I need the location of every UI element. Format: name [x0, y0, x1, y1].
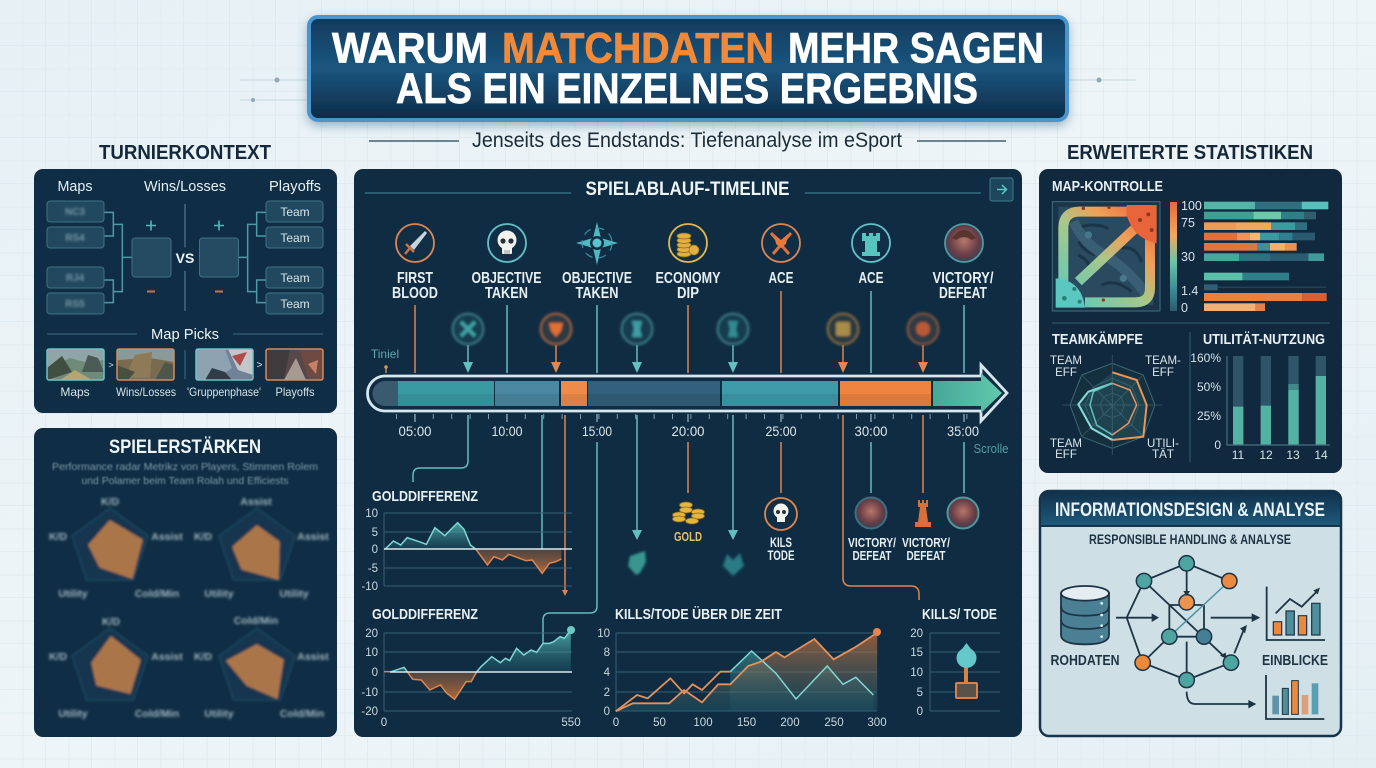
timeline arrow bar	[368, 365, 1007, 421]
radar charts: K/D	[101, 496, 119, 508]
icon: insights chart lower	[1266, 675, 1324, 719]
chart: Kills/Tode trophy: 15	[910, 647, 923, 659]
blurred description: und Polamer beim Team Rolah und Efficiests	[82, 475, 288, 487]
chart: Golddifferenz upper: -10	[361, 581, 378, 593]
blurred description: Performance radar Metrikz von Players, Stimmen Rolem	[52, 461, 318, 473]
icon: gold coins	[672, 502, 704, 524]
chart: Kills/Tode trophy: 0	[917, 706, 923, 718]
chart: Kills/Tode über die Zeit: 250	[824, 717, 844, 729]
event labels: VICTORY/	[932, 270, 994, 287]
map thumbnail labels: Playoffs	[276, 385, 314, 399]
map control heading: MAP-KONTROLLE	[1052, 178, 1163, 195]
event labels: DEFEAT	[939, 285, 987, 302]
bracket connector lines	[104, 204, 266, 311]
gold label: GOLD	[674, 530, 702, 544]
chart: Kills/Tode trophy: 5	[917, 687, 923, 699]
chart: Golddifferenz upper: 10	[365, 508, 378, 520]
panel: Spielerstärken	[34, 428, 337, 737]
chart: Golddifferenz lower: GOLDDIFFERENZ	[372, 606, 478, 623]
chart: Kills/Tode trophy: KILLS/ TODE	[922, 606, 997, 623]
bracket right team boxes	[266, 201, 323, 314]
timeline start marker: Tiniel	[371, 347, 399, 361]
panel header	[1040, 491, 1341, 526]
utility heading: UTILITÄT-NUTZUNG	[1203, 331, 1325, 348]
radar labels	[1050, 355, 1181, 461]
chart: Kills/Tode über die Zeit: 4	[604, 667, 611, 679]
bracket right team boxes: Team	[280, 231, 310, 245]
bracket column headings	[58, 178, 321, 195]
chart: Golddifferenz upper: 0	[372, 544, 378, 556]
chart: Golddifferenz lower: 0	[381, 717, 387, 729]
radar charts: Assist	[240, 496, 272, 508]
chart: Golddifferenz upper: 5	[372, 527, 378, 539]
chart: Kills/Tode über die Zeit: 150	[737, 717, 756, 729]
blurred seed labels: RS4	[65, 233, 85, 244]
event labels: OBJECTIVE	[472, 270, 542, 287]
bracket column headings: Maps	[58, 178, 92, 195]
victory/defeat labels	[848, 535, 950, 563]
icon: player portrait	[945, 224, 983, 262]
chart: Golddifferenz lower: 0	[372, 667, 378, 679]
map thumbnail labels: Wins/Losses	[116, 385, 176, 399]
event labels: DIP	[677, 285, 699, 302]
bar chart: utility usage: 13	[1286, 448, 1300, 462]
radar labels: TEAM	[1050, 355, 1082, 367]
title banner: MEHR SAGEN	[788, 24, 1044, 72]
map thumbnails: >	[257, 360, 263, 371]
event labels: FIRST	[397, 270, 433, 287]
radar charts: K/D	[102, 616, 120, 628]
title banner: WARUM	[332, 24, 488, 72]
blurred seed labels	[65, 207, 85, 310]
map thumbnails: >	[108, 360, 114, 370]
event labels	[392, 270, 994, 302]
radar charts: Utility	[204, 588, 234, 600]
bar chart: utility usage	[1190, 351, 1330, 462]
time labels: 20:00	[672, 423, 705, 439]
chart: Kills/Tode trophy: 10	[910, 667, 923, 679]
bracket left boxes	[47, 201, 104, 314]
chart: Kills/Tode über die Zeit: 100	[693, 717, 713, 729]
time labels: 30:00	[854, 423, 888, 439]
time labels	[398, 423, 979, 439]
event labels: ACE	[768, 270, 794, 287]
event labels: TAKEN	[485, 285, 528, 302]
bar chart: utility usage: 25%	[1197, 409, 1221, 423]
map picks heading: Map Picks	[151, 326, 219, 343]
map thumbnails	[47, 349, 323, 380]
icon: coins	[669, 224, 707, 262]
title banner	[309, 17, 1067, 120]
scroll label: Scrolle	[974, 441, 1008, 456]
bar chart: utility usage: 50%	[1197, 380, 1221, 394]
color scale legend: 0	[1181, 301, 1188, 315]
chart: Golddifferenz lower	[361, 606, 581, 729]
blurred description	[52, 461, 318, 487]
heading: Turnierkontext: TURNIERKONTEXT	[99, 142, 271, 164]
radar charts: Utility	[204, 708, 234, 720]
scroll button	[990, 178, 1013, 201]
insights label: EINBLICKE	[1262, 653, 1328, 669]
icon: teal objective blobs	[628, 551, 744, 576]
chart: Kills/Tode über die Zeit: 10	[597, 628, 610, 640]
map thumbnail labels	[60, 385, 314, 399]
event labels: TAKEN	[576, 285, 618, 302]
chart: Golddifferenz upper: -5	[368, 563, 378, 575]
radar labels: EFF	[1152, 367, 1174, 379]
icon: portraits and tower	[856, 498, 978, 528]
chart: Kills/Tode über die Zeit: 8	[604, 647, 610, 659]
title banner: ALS EIN EINZELNES ERGEBNIS	[396, 65, 978, 113]
chart: Kills/Tode über die Zeit: 300	[867, 717, 887, 729]
blurred seed labels: RJ4	[66, 273, 85, 284]
time labels: 25:00	[766, 423, 797, 439]
chart: Kills/Tode über die Zeit: 200	[780, 717, 800, 729]
blurred seed labels: RS5	[65, 299, 85, 310]
panel: Turnierkontext	[34, 169, 337, 413]
subtitle: Jenseits des Endstands: Tiefenanalyse im eSport	[472, 128, 902, 152]
event connector lines above bar	[415, 291, 964, 373]
event labels: ECONOMY	[656, 270, 721, 287]
time labels: 10:00	[492, 423, 523, 439]
teamfights heading: TEAMKÄMPFE	[1052, 331, 1143, 348]
connector lines below bar	[413, 415, 964, 643]
bar chart: utility usage: 160%	[1190, 351, 1221, 365]
radar charts: Cold/Min	[135, 588, 179, 600]
bracket right team boxes: Team	[280, 271, 310, 285]
chart: Kills/Tode trophy	[910, 606, 1000, 718]
secondary event markers	[452, 314, 938, 373]
chart: Kills/Tode über die Zeit	[597, 606, 887, 729]
color scale legend: 100	[1181, 199, 1202, 213]
heading: Erweiterte Statistiken: ERWEITERTE STATISTIKEN	[1067, 142, 1313, 164]
chart: Kills/Tode über die Zeit: 0	[604, 706, 610, 718]
radar labels: EFF	[1055, 449, 1077, 461]
icon: database	[1061, 586, 1109, 644]
chart: Kills/Tode über die Zeit: 50	[653, 717, 666, 729]
event labels: ACE	[858, 270, 884, 287]
radar charts: Assist	[151, 651, 183, 663]
bar chart: utility usage: 14	[1314, 448, 1328, 462]
stacked horizontal bars	[1204, 202, 1328, 311]
blurred seed labels: NC3	[65, 207, 85, 218]
map thumbnail labels: Maps	[60, 385, 90, 399]
bracket column headings: Playoffs	[269, 178, 321, 195]
color scale legend	[1170, 199, 1202, 315]
radar charts: Utility	[58, 708, 88, 720]
radar charts: Assist	[151, 531, 183, 543]
chart: Golddifferenz lower: -20	[361, 706, 378, 718]
bar chart: utility usage: 0	[1214, 438, 1221, 452]
icon: skull	[488, 224, 526, 262]
radar labels: TEAM	[1050, 438, 1082, 450]
radar charts: K/D	[194, 651, 212, 663]
network diagram	[1116, 556, 1260, 708]
timeline start marker	[371, 347, 399, 373]
map thumbnail labels: 'Gruppenphase'	[187, 385, 261, 399]
chart: Kills/Tode über die Zeit: 0	[613, 717, 619, 729]
bracket right team boxes: Team	[280, 297, 310, 311]
chart: Kills/Tode über die Zeit: KILLS/TODE ÜBER DIE ZEIT	[615, 606, 782, 623]
victory/defeat labels: DEFEAT	[852, 548, 892, 563]
chart: Golddifferenz upper	[361, 488, 572, 593]
chart: Golddifferenz lower: 550	[561, 717, 581, 729]
heat map	[1052, 202, 1160, 311]
icon: objective compass	[576, 222, 618, 265]
time labels: 35:00	[947, 423, 979, 439]
radar chart: teamfights	[1062, 355, 1162, 455]
time axis ticks	[396, 414, 980, 422]
icon: insights chart upper	[1267, 587, 1325, 640]
chart: Golddifferenz lower: 20	[365, 628, 378, 640]
bar chart: utility usage: 12	[1259, 448, 1273, 462]
time labels: 05:00	[398, 423, 432, 439]
radar charts: Utility	[279, 588, 309, 600]
victory/defeat labels: VICTORY/	[848, 535, 896, 550]
radar charts	[49, 496, 329, 720]
time labels: 15:00	[582, 423, 612, 439]
icon: sword	[396, 224, 434, 262]
radar charts: Assist	[297, 651, 329, 663]
panel: Erweiterte Statistiken	[1039, 169, 1342, 473]
chart: Golddifferenz lower: -10	[361, 687, 378, 699]
color scale legend: 75	[1181, 216, 1195, 230]
radar labels: TEAM-	[1145, 355, 1181, 367]
title banner: MATCHDATEN	[502, 24, 774, 72]
radar charts: K/D	[49, 531, 67, 543]
radar charts: Utility	[58, 588, 88, 600]
panel: Spielablauf-Timeline	[354, 169, 1022, 737]
bracket column headings: Wins/Losses	[144, 178, 226, 195]
event labels: BLOOD	[392, 285, 438, 302]
heading: SPIELERSTÄRKEN	[109, 437, 261, 458]
victory/defeat labels: VICTORY/	[902, 535, 950, 550]
bracket right team boxes: Team	[280, 205, 310, 219]
chart: Kills/Tode über die Zeit: 2	[604, 687, 610, 699]
radar labels: UTILI-	[1147, 438, 1179, 450]
radar labels: EFF	[1055, 367, 1077, 379]
versus boxes	[132, 220, 238, 292]
kills label: KILS	[770, 534, 792, 550]
color scale legend: 30	[1181, 250, 1195, 264]
icon: skull lower	[765, 498, 797, 530]
radar charts: Cold/Min	[234, 615, 278, 627]
kills label: TODE	[768, 547, 794, 563]
victory/defeat labels: DEFEAT	[906, 548, 946, 563]
kills label	[768, 534, 794, 563]
panel header: INFORMATIONSDESIGN & ANALYSE	[1055, 500, 1325, 521]
radar charts: Assist	[297, 531, 329, 543]
chart: Kills/Tode trophy: 20	[910, 628, 923, 640]
radar charts: K/D	[49, 651, 67, 663]
versus boxes: VS	[176, 250, 194, 266]
icon: tower	[852, 224, 890, 262]
color scale legend: 1.4	[1181, 284, 1198, 298]
radar charts: K/D	[194, 531, 212, 543]
chart: Golddifferenz lower: 10	[365, 647, 378, 659]
panel: Informationsdesign und Analyse	[1040, 491, 1341, 736]
bar chart: utility usage: 11	[1232, 448, 1245, 462]
radar charts: Cold/Min	[135, 708, 179, 720]
event labels: OBJECTIVE	[562, 270, 632, 287]
radar charts: Cold/Min	[280, 708, 324, 720]
radar labels: TÄT	[1152, 449, 1174, 461]
raw data label: ROHDATEN	[1050, 653, 1120, 669]
chart: Golddifferenz upper: GOLDDIFFERENZ	[372, 488, 478, 505]
timeline heading: SPIELABLAUF-TIMELINE	[586, 179, 790, 200]
icon: crossed swords	[762, 224, 800, 262]
responsible handling subtitle: RESPONSIBLE HANDLING & ANALYSE	[1089, 532, 1291, 547]
